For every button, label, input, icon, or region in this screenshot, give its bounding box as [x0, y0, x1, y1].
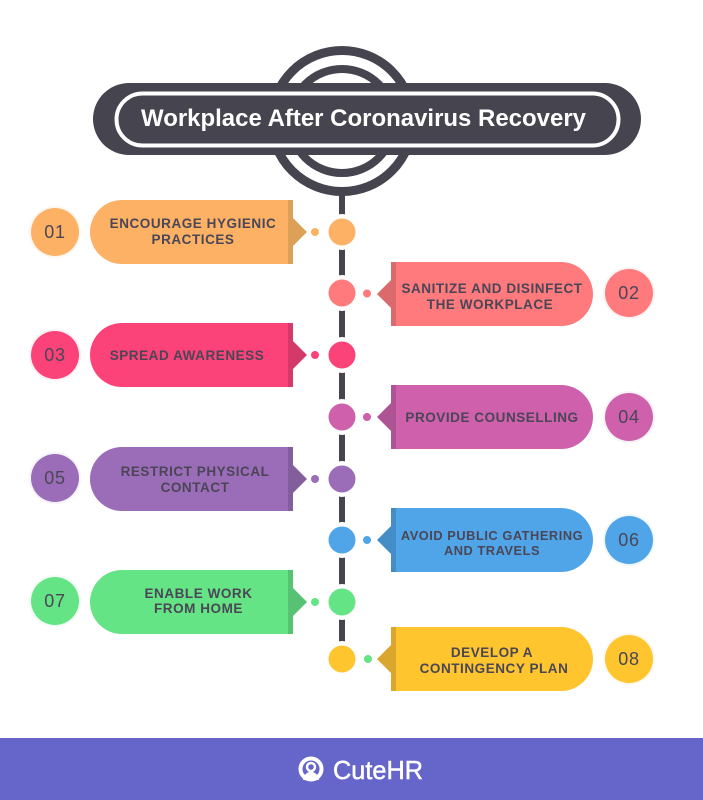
icon: CuteHR logo	[300, 758, 322, 780]
step 07: ENABLE WORK	[144, 586, 253, 601]
banner inner outline	[116, 94, 618, 146]
step 08: 08	[618, 649, 640, 669]
step 01: PRACTICES	[152, 232, 234, 247]
step 03: SPREAD AWARENESS	[110, 348, 264, 363]
step 08: CONTINGENCY PLAN	[420, 661, 568, 676]
step 01	[29, 200, 360, 264]
step 07: FROM HOME	[154, 601, 243, 616]
step 06: AVOID PUBLIC GATHERING	[401, 528, 583, 543]
step 01: 01	[44, 222, 66, 242]
step 02: THE WORKPLACE	[427, 297, 553, 312]
step 06: AND TRAVELS	[444, 543, 540, 558]
concentric rings behind banner	[272, 50, 412, 192]
footer bar	[0, 738, 703, 800]
step 06: 06	[618, 530, 640, 550]
step 06	[324, 508, 655, 572]
step 02: SANITIZE AND DISINFECT	[401, 281, 583, 296]
brand name: CuteHR	[333, 755, 423, 785]
banner pill	[93, 83, 641, 155]
step 04: PROVIDE COUNSELLING	[405, 410, 579, 425]
step 04: 04	[618, 407, 640, 427]
step 05	[29, 447, 360, 511]
step 03: 03	[44, 345, 66, 365]
step 03	[29, 323, 360, 387]
header banner	[93, 50, 641, 192]
step 04	[324, 385, 655, 449]
step 07	[29, 570, 360, 634]
step 05: RESTRICT PHYSICAL	[121, 464, 269, 479]
step 08: DEVELOP A	[451, 645, 533, 660]
step 05: CONTACT	[161, 480, 230, 495]
timeline spine	[339, 190, 345, 650]
step 08	[324, 627, 655, 691]
step 02	[324, 262, 655, 326]
step 01: ENCOURAGE HYGIENIC	[110, 216, 276, 231]
step 05: 05	[44, 468, 66, 488]
step 07: 07	[44, 591, 66, 611]
title: Workplace After Coronavirus Recovery	[141, 105, 586, 132]
step 02: 02	[618, 283, 640, 303]
